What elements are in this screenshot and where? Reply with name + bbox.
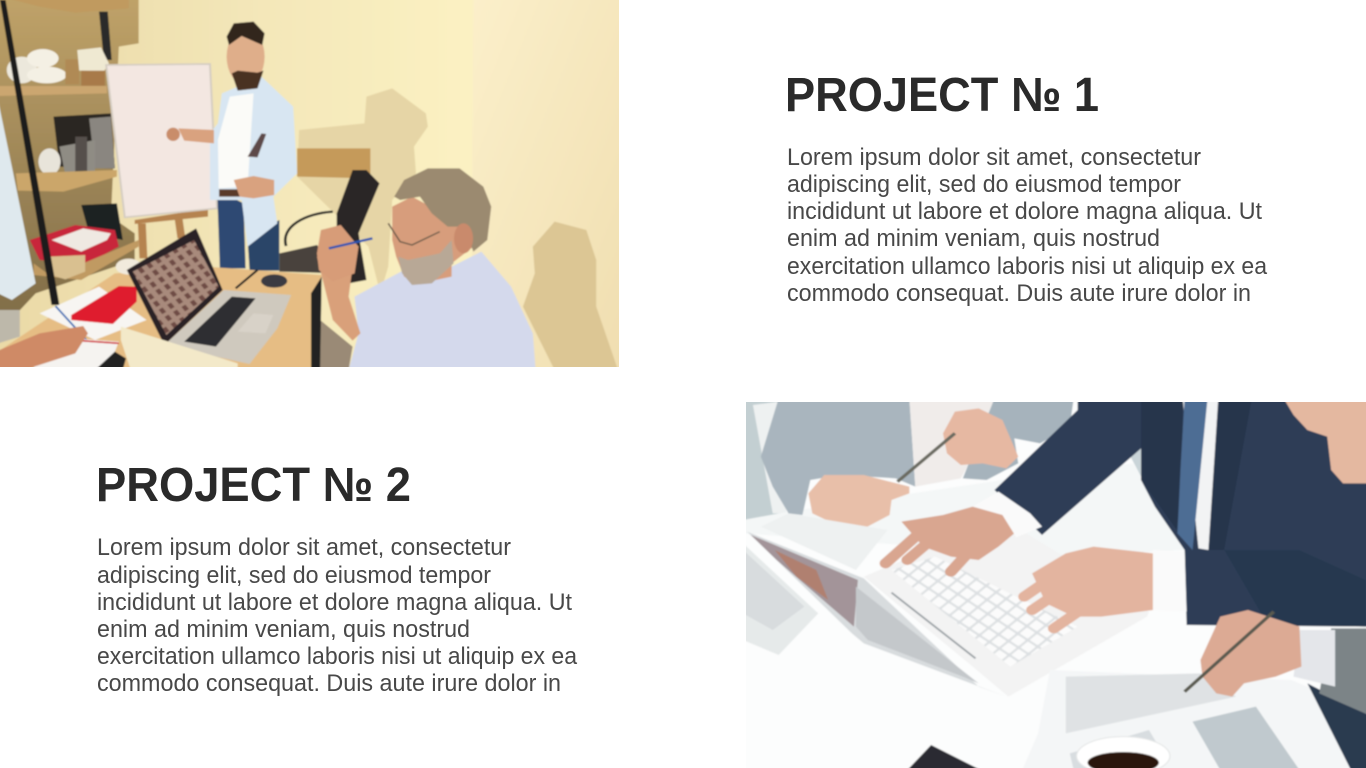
text block: project 1 description: exercitation ullamco laboris nisi ut aliquip ex ea: [787, 253, 1268, 280]
laptop: [747, 532, 1149, 697]
text block: project 2 description: commodo consequat. Duis aute irure dolor in: [97, 670, 561, 697]
table and background: [743, 398, 1366, 768]
hands on keyboard: [886, 492, 1187, 628]
document and chart: [1022, 670, 1357, 768]
text block: project 2 description: adipiscing elit, sed do eiusmod tempor: [97, 562, 491, 589]
heading: project 2: PROJECT № 2: [96, 459, 411, 512]
photo: office presentation: [0, 0, 619, 367]
phone and coffee cup: [907, 737, 1170, 768]
photo: business team at laptop: [746, 402, 1366, 768]
chair: [279, 170, 380, 283]
text block: project 1 description: incididunt ut labore et dolore magna aliqua. Ut: [787, 198, 1262, 225]
panel: project 1 text: [785, 69, 1268, 307]
text block: project 2 description: Lorem ipsum dolor sit amet, consectetur: [97, 534, 511, 561]
text block: project 2 description: exercitation ullamco laboris nisi ut aliquip ex ea: [97, 643, 578, 670]
laptop: [127, 228, 291, 364]
wall: [0, 0, 624, 372]
panel: project 2 text: [96, 459, 578, 697]
woman in grey jacket: [761, 398, 1074, 531]
text block: project 2 description: [97, 534, 578, 697]
text block: project 1 description: [787, 144, 1268, 307]
man in navy suit: [995, 398, 1366, 627]
foreground notebook and hand: [0, 326, 238, 372]
text block: project 2 description: enim ad minim veniam, quis nostrud: [97, 616, 470, 643]
shelves: [0, 0, 139, 343]
table: [0, 259, 353, 370]
text block: project 1 description: enim ad minim veniam, quis nostrud: [787, 225, 1160, 252]
whiteboard: [106, 64, 217, 258]
heading: project 1: PROJECT № 1: [785, 69, 1099, 122]
papers: [743, 513, 888, 655]
presenter: [166, 22, 297, 271]
hand with pen: [1185, 610, 1366, 768]
text block: project 2 description: incididunt ut labore et dolore magna aliqua. Ut: [97, 589, 572, 616]
seated man: [317, 168, 536, 370]
text block: project 1 description: adipiscing elit, sed do eiusmod tempor: [787, 171, 1181, 198]
text block: project 1 description: commodo consequat. Duis aute irure dolor in: [787, 280, 1251, 307]
text block: project 1 description: Lorem ipsum dolor sit amet, consectetur: [787, 144, 1201, 171]
